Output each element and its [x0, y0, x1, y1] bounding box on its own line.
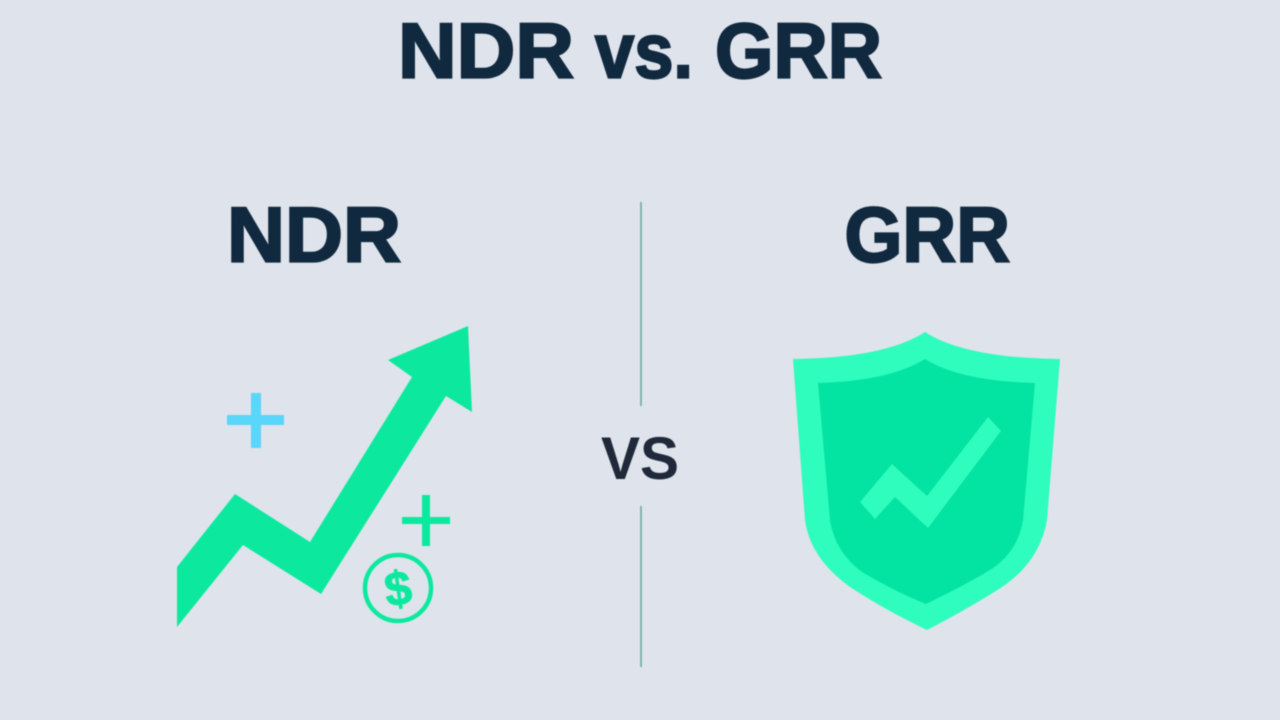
icon: GRR shield	[793, 332, 1060, 630]
title: vs.	[595, 6, 693, 94]
title: NDR	[398, 6, 574, 94]
icon: green plus	[402, 495, 450, 546]
heading: NDR: NDR	[227, 190, 401, 278]
title: GRR	[715, 6, 882, 94]
icon: NDR growth	[177, 326, 472, 627]
icon: dollar coin: $	[381, 561, 415, 618]
icon: dollar coin	[365, 555, 431, 621]
center divider	[640, 202, 642, 667]
check mark trend line	[860, 417, 1001, 528]
shield outer border	[793, 332, 1060, 630]
VS label: VS	[601, 425, 679, 492]
title	[398, 6, 882, 94]
heading: GRR: GRR	[844, 190, 1010, 278]
icon: rising arrow	[177, 326, 472, 627]
icon: blue plus	[227, 393, 284, 448]
shield inner fill	[818, 359, 1035, 604]
